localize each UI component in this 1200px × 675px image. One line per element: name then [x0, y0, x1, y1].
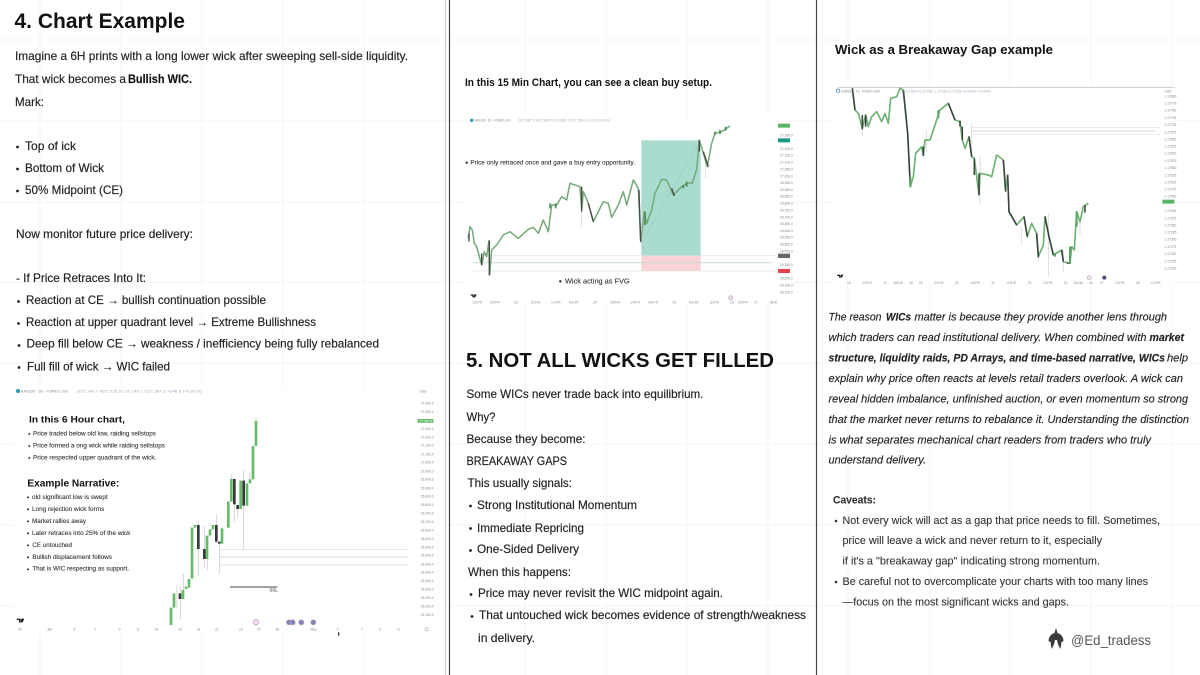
time axis: 9: [379, 628, 381, 632]
list: narrative: [27, 495, 130, 573]
heading: 15 min setup: In this 15 Min Chart, you can see a clean buy setup.: [465, 77, 712, 89]
chart note: retraced once: Price only retraced once and gave a buy entry opportunity.: [470, 159, 635, 166]
time axis: 12: [397, 628, 401, 632]
time axis: 27: [1100, 281, 1104, 285]
price axis: 1.17475: [1164, 188, 1177, 192]
list: retrace reactions: Deep fill below CE → weakness / inefficiency being fully rebalanced: [26, 338, 379, 350]
time axis: May: [310, 628, 317, 632]
time axis: 12:00 PM: [1007, 281, 1016, 285]
icon: tradingview logo: [837, 275, 843, 278]
text block: why wics matter: The reason: [828, 312, 882, 324]
price axis: 26,850.0: [780, 195, 793, 199]
text block: intro: That wick becomes a: [15, 73, 127, 86]
text block: why wics matter: that the market never returns to rebalance it. Understanding the distinction: [828, 414, 1189, 426]
text block: breakaway gaps: This usually signals:: [468, 477, 572, 490]
heading: 4. Chart Example: 4. Chart Example: [14, 9, 185, 33]
price axis: 26,650.0: [780, 222, 793, 226]
time axis: 7: [361, 628, 363, 632]
icon: event marker: [729, 296, 733, 300]
time axis: 12:00 PM: [472, 301, 482, 305]
time axis: 29: [18, 628, 22, 632]
price axis: 26,100.0: [421, 613, 434, 617]
chart legend header: O27,140.7 H27,515.9 L27,140.7 C27,387.5 +246.8 (+0.91%): [77, 389, 202, 393]
price axis: 1.17700: [1164, 123, 1177, 127]
icon: event markers: [1087, 276, 1106, 280]
price axis: 1.17550: [1164, 166, 1177, 170]
text block: why wics matter: reveal hidden imbalance, unfinished auction, or even momentum so strong: [828, 393, 1189, 405]
list: signals: Strong Institutional Momentum: [477, 499, 637, 512]
chart legend header: [836, 89, 991, 93]
list: wick marks: [16, 140, 123, 197]
price axis: 26,900.0: [421, 486, 434, 490]
list: caveats: if it's a "breakaway gap" indicating strong momentum.: [842, 555, 1100, 567]
list: retrace reactions: Full fill of wick → WIC failed: [27, 360, 170, 374]
price axis: 1.17675: [1164, 130, 1177, 134]
time axis: 06:00 AM: [531, 301, 540, 305]
time axis: 3: [73, 628, 75, 632]
list: caveats: Be careful not to overcomplicate your charts with too many lines: [842, 576, 1149, 588]
time axis: 12:00 PM: [862, 281, 872, 285]
text block: breakaway gaps: BREAKAWAY GAPS: [466, 455, 567, 468]
price axis: [418, 389, 434, 617]
price axis: 27,100.0: [780, 161, 793, 165]
time axis: 22: [991, 281, 995, 285]
chart note: wick as FVG: Wick acting as FVG: [565, 276, 630, 285]
text block: why wics matter: [828, 312, 1189, 467]
time axis: 06:00 AM: [689, 301, 698, 305]
price line: [838, 87, 1175, 277]
time axis: 25: [672, 301, 676, 305]
list: chart notes: Price respected upper quadrant of the wick.: [33, 455, 157, 461]
list: chart notes: Price traded below old low, raiding sellstops: [33, 431, 156, 437]
price axis: 26,700.0: [421, 512, 434, 516]
price axis: 26,200.0: [421, 604, 434, 608]
chart legend header: [470, 119, 610, 123]
time axis: 28: [1136, 281, 1140, 285]
price axis: 26,450.0: [780, 249, 793, 253]
time axis: 06:00: [770, 301, 777, 305]
price axis: 27,100.0: [421, 452, 434, 456]
price axis: 1.17600: [1164, 152, 1177, 156]
list: outcomes: That untouched wick becomes evidence of strength/weakness: [479, 609, 806, 622]
text block: why wics matter: is what separates mechanical chart readers from traders who truly: [828, 434, 1152, 446]
text block: breakaway gaps: Some WICs never trade back into equilibrium.: [466, 388, 704, 401]
price axis: 26,550.0: [780, 236, 793, 240]
time axis: 18: [909, 281, 913, 285]
time axis: 23: [1028, 281, 1032, 285]
time axis: 21: [215, 628, 219, 632]
time axis: 12:00 PM: [934, 281, 943, 285]
list: signals: One-Sided Delivery: [477, 543, 579, 556]
price axis: 1.17625: [1164, 145, 1177, 149]
price axis: 27,200.0: [421, 427, 434, 431]
icon: event markers: [253, 620, 428, 636]
price axis: 26,700.0: [780, 215, 793, 219]
time axis: 20: [919, 281, 923, 285]
price axis: 26,800.0: [421, 495, 434, 499]
text block: why wics matter: which traders can read institutional delivery. When combined with: [828, 332, 1146, 344]
text block: breakaway gaps: [466, 388, 704, 490]
time axis: 24: [593, 301, 597, 305]
list: retrace reactions: [16, 272, 379, 374]
text block: intro: Imagine a 6H prints with a long lower wick after sweeping sell-side liquidity.: [15, 50, 408, 63]
price axis: 27,300.0: [421, 410, 434, 414]
price axis: 1.17775: [1164, 102, 1177, 106]
price axis: 1.17300: [1164, 238, 1177, 242]
price axis: 26,800.0: [421, 503, 434, 507]
text block: breakaway gaps: Why?: [466, 411, 496, 424]
time axis: [18, 628, 401, 632]
time axis: 06:00 PM: [738, 301, 748, 305]
list: caveats: [835, 515, 1160, 608]
time axis: 9: [119, 628, 121, 632]
position box: reward: [641, 140, 701, 256]
text block: when this happens: When this happens:: [468, 566, 571, 579]
price axis: 26,200.0: [421, 596, 434, 600]
price axis: 26,600.0: [780, 229, 793, 233]
price axis: 27,400.0: [421, 402, 434, 406]
time axis: 23: [239, 628, 243, 632]
list: retrace reactions: - If Price Retraces Into It:: [16, 272, 146, 285]
chart: EURUSD: [835, 86, 1177, 285]
time axis: 23: [514, 301, 518, 305]
price axis: 26,500.0: [780, 243, 793, 247]
text block: why wics matter: understand delivery.: [828, 455, 926, 467]
time axis: 12:00 PM: [1115, 281, 1124, 285]
list: outcomes: [470, 587, 806, 645]
price axis: 26,250.0: [780, 277, 793, 281]
text block: intro: Mark:: [15, 96, 44, 109]
time axis: 12:00 PM: [710, 301, 719, 305]
price axis: 26,900.0: [421, 478, 434, 482]
time axis: 26: [1089, 281, 1093, 285]
list: wick marks: Top of ick: [25, 140, 76, 153]
time axis: 11: [136, 628, 140, 632]
price axis: USD: [1164, 89, 1172, 93]
chart heading: example narrative: Example Narrative:: [27, 478, 119, 489]
price axis: 1.17575: [1164, 159, 1177, 163]
price axis: [778, 124, 793, 294]
price line: [468, 126, 777, 275]
price axis: [1162, 89, 1177, 270]
chart legend header: [16, 389, 202, 393]
text block: why wics matter: structure, liquidity raids, PD Arrays, and time-based narrative, WICs: [828, 353, 1165, 365]
text block: why wics matter: help: [1167, 353, 1188, 365]
price axis: 26,400.0: [421, 571, 434, 575]
price axis: 26,400.0: [421, 562, 434, 566]
price axis: 1.17650: [1164, 137, 1177, 141]
time axis: 12:00 PM: [630, 301, 640, 305]
time axis: 27: [754, 301, 758, 305]
time axis: 06:00 AM: [610, 301, 620, 305]
price axis: 27,200.0: [421, 435, 434, 439]
time axis: Apr: [47, 628, 53, 632]
panel: 15 min chart and not all wicks: [465, 77, 806, 645]
time axis: 28: [275, 628, 279, 632]
list: outcomes: Price may never revisit the WIC midpoint again.: [478, 587, 723, 600]
price axis: 27,300.0: [780, 133, 793, 137]
list: retrace reactions: Reaction at upper quadrant level → Extreme Bullishness: [26, 316, 316, 329]
price axis: 27,150.0: [780, 154, 793, 158]
list: caveats: —focus on the most significant wicks and gaps.: [842, 596, 1069, 608]
price axis: 1.17400: [1164, 209, 1177, 213]
text block: intro: Bullish WIC.: [128, 73, 192, 86]
price axis: 1.17325: [1164, 231, 1177, 235]
time axis: [847, 281, 1160, 285]
time axis: 24: [1064, 281, 1068, 285]
price axis: 1.17250: [1164, 252, 1177, 256]
text block: why wics matter: WICs: [886, 312, 911, 324]
price axis: 26,150.0: [780, 290, 793, 294]
price axis: 1.17200: [1164, 266, 1177, 270]
price axis: 1.17450: [1164, 195, 1177, 199]
price axis: 27,000.0: [421, 461, 434, 465]
time axis: 5: [337, 628, 339, 632]
time axis: 18: [197, 628, 201, 632]
time axis: 08:00 AM: [1074, 281, 1083, 285]
price axis: 26,500.0: [421, 554, 434, 558]
price axis: 26,300.0: [421, 579, 434, 583]
panel: chart example: [14, 9, 444, 636]
time axis: 06:00 PM: [648, 301, 658, 305]
list: signals: [469, 499, 637, 556]
list: caveats: Not every wick will act as a gap that price needs to fill. Sometimes,: [842, 515, 1160, 527]
list: signals: Immediate Repricing: [477, 522, 584, 535]
text block: intro: [15, 50, 408, 109]
time axis: 16: [847, 281, 851, 285]
price axis: 26,800.0: [780, 202, 793, 206]
price axis: 1.17725: [1164, 116, 1177, 120]
heading: not all wicks get filled: 5. NOT ALL WICKS GET FILLED: [466, 349, 774, 372]
price axis: 26,200.0: [780, 284, 793, 288]
list: narrative: Bullish displacement follows: [32, 555, 112, 561]
chart legend header: NAS100 · 15 · FOREX.com: [474, 119, 511, 123]
text block: why wics matter: market: [1150, 332, 1185, 344]
candles: [171, 418, 408, 625]
text block: breakaway gaps: Because they become:: [466, 433, 586, 446]
price axis: 1.17750: [1164, 109, 1177, 113]
time axis: 06:00 PM: [569, 301, 578, 305]
text block: why wics matter: matter is because they provide another lens through: [914, 312, 1167, 324]
time axis: 12:00 PM: [1043, 281, 1052, 285]
icon: tradingview logo: [17, 619, 24, 622]
price axis: 26,600.0: [421, 537, 434, 541]
text block: monitor delivery: Now monitor future price delivery:: [16, 228, 193, 241]
chart legend header: O27,387.5 H27,395.0 L27,380.2 C27,390.1 +2.6 (+0.01%): [518, 119, 610, 123]
price axis: 26,500.0: [421, 545, 434, 549]
price axis: 26,950.0: [780, 181, 793, 185]
price axis: 1.17225: [1164, 259, 1177, 263]
time axis: [472, 301, 777, 305]
author credit: [1048, 628, 1151, 649]
price axis: 26,900.0: [780, 188, 793, 192]
list: wick marks: 50% Midpoint (CE): [25, 184, 123, 197]
price axis: 26,700.0: [421, 520, 434, 524]
price axis: 1.17500: [1164, 180, 1177, 184]
list: chart notes: Price formed a ong wick while raiding sellstops: [33, 443, 165, 449]
list: caveats: price will leave a wick and never return to it, especially: [842, 535, 1103, 547]
price axis: 27,000.0: [780, 174, 793, 178]
label: SSL: SSL: [269, 588, 278, 594]
price axis: 27,200.0: [780, 147, 793, 151]
price axis: 27,050.0: [780, 167, 793, 171]
price axis: 1.17375: [1164, 216, 1177, 220]
chart heading: in this 6 hour chart: In this 6 Hour chart,: [29, 415, 125, 425]
icon: spartan helmet: [1048, 628, 1064, 649]
chart legend header: EURUSD · 15 · FOREX.COM: [841, 89, 880, 93]
time axis: 06:00 PM: [490, 301, 500, 305]
list: narrative: Long rejection wick forms: [32, 507, 104, 513]
time axis: 16: [178, 628, 182, 632]
time axis: 12:00 PM: [551, 301, 560, 305]
price axis: 1.17275: [1164, 245, 1177, 249]
chart: 6 hour NAS100: [14, 388, 444, 636]
price axis: 26,350.0: [780, 263, 793, 267]
icon: tradingview logo: [471, 294, 477, 297]
time axis: 12:00 PM: [1151, 281, 1160, 285]
price axis: 26,300.0: [421, 588, 434, 592]
list: narrative: CE untouched: [32, 543, 72, 549]
heading: breakaway gap example: Wick as a Breakaway Gap example: [835, 42, 1053, 57]
time axis: 25: [257, 628, 261, 632]
price axis: 1.17800: [1164, 94, 1177, 98]
text block: why wics matter: explain why price often reacts at levels retail traders overlook. A wick can: [828, 373, 1183, 385]
panel: breakaway gap example: [828, 42, 1189, 649]
price axis: 1.17525: [1164, 173, 1177, 177]
heading: caveats: Caveats:: [833, 494, 876, 506]
list: wick marks: Bottom of Wick: [25, 162, 104, 175]
time axis: 14: [154, 628, 158, 632]
time axis: 21: [955, 281, 959, 285]
time axis: 7: [94, 628, 96, 632]
list: narrative: Market rallies away: [32, 519, 86, 525]
time axis: 08:00 AM: [893, 281, 903, 285]
price axis: 27,000.0: [421, 469, 434, 473]
list: narrative: That is WIC respecting as support.: [32, 567, 129, 573]
time axis: 26: [730, 301, 734, 305]
chart: 15 min NAS100: [465, 117, 793, 305]
price axis: 26,750.0: [780, 208, 793, 212]
chart legend header: O1.17205 H1.17245 L1.17190 C1.17232 +0.00027 (+0.02%): [902, 89, 991, 93]
list: narrative: old significant low is swept: [32, 495, 108, 501]
list: chart notes: [28, 431, 165, 461]
list: narrative: Later retraces into 25% of the wick: [32, 531, 130, 537]
time axis: 17: [883, 281, 887, 285]
price axis: USD: [419, 389, 427, 393]
handle: @Ed_tradess: [1071, 633, 1151, 648]
price axis: 27,387.5: [419, 419, 432, 423]
price axis: 27,100.0: [421, 444, 434, 448]
list: outcomes: in delivery.: [478, 632, 535, 645]
price axis: 1.17350: [1164, 223, 1177, 227]
list: retrace reactions: Reaction at CE → bullish continuation possible: [26, 294, 266, 307]
price axis: 26,600.0: [421, 529, 434, 533]
chart legend header: NAS100 · 6h · FOREX.com: [21, 389, 69, 393]
time axis: 12:00 PM: [970, 281, 980, 285]
position box: risk: [641, 256, 701, 271]
